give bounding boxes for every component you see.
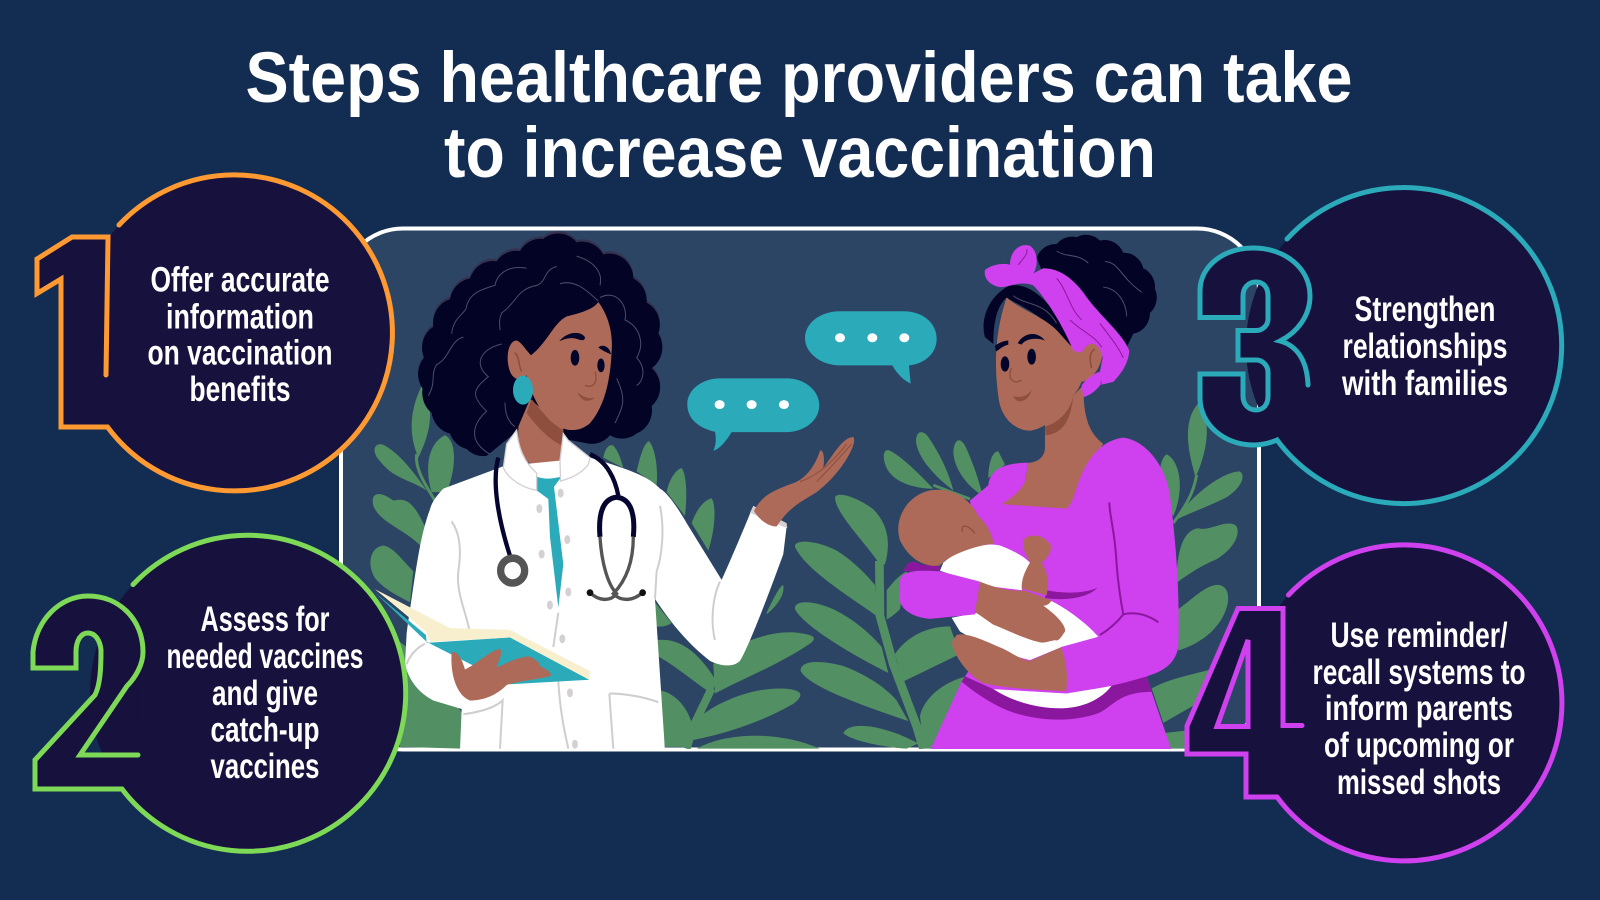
- text: step 3: relationships: [1342, 327, 1508, 366]
- title: Steps healthcare providers can take: [246, 39, 1352, 118]
- text: step 2: Assess for: [200, 600, 330, 639]
- mother hair: [1037, 235, 1157, 347]
- stethoscope: [496, 454, 646, 599]
- text: step 4: recall systems to: [1312, 653, 1526, 692]
- mother face: [984, 285, 1103, 431]
- text: step 1: benefits: [190, 370, 290, 409]
- book: [375, 589, 590, 684]
- text: step 2: and give: [212, 674, 318, 713]
- numeral 3 and ring: [1200, 188, 1562, 504]
- plants behind the doctor: [370, 386, 820, 749]
- step 1 badge: [37, 175, 392, 491]
- plants behind the mother: [795, 403, 1243, 749]
- text: step 2: catch-up: [210, 710, 320, 750]
- doctor: [375, 231, 854, 750]
- mother neck and dress: [930, 385, 1179, 750]
- white coat: [405, 430, 787, 750]
- numeral 2 and ring: [33, 535, 406, 851]
- mother arms: [899, 571, 1178, 693]
- numeral 1 and ring: [37, 175, 392, 491]
- text: step 4: [1312, 616, 1526, 802]
- raised hand: [754, 437, 854, 527]
- baby wrap: [940, 544, 1113, 708]
- text: step 4: inform parents: [1325, 689, 1513, 728]
- text: step 1: Offer accurate: [150, 260, 330, 300]
- title: to increase vaccination: [444, 114, 1156, 193]
- speech bubble left: [687, 378, 819, 451]
- title: [246, 39, 1352, 193]
- hand holding book: [451, 649, 551, 700]
- numeral 4 and ring: [1187, 545, 1562, 861]
- text: step 2: vaccines: [210, 747, 320, 786]
- text: step 4: of upcoming or: [1324, 726, 1514, 765]
- text: step 3: [1341, 290, 1508, 403]
- text: step 1: on vaccination: [148, 334, 332, 372]
- step 2 badge: [33, 535, 406, 851]
- text: step 3: with families: [1341, 364, 1508, 403]
- text: step 4: missed shots: [1337, 763, 1501, 802]
- step 3 badge: [1200, 188, 1562, 504]
- headband: [985, 245, 1142, 397]
- doctor neck and face: [508, 302, 612, 478]
- text: step 1: [148, 260, 332, 409]
- text: step 2: [166, 600, 364, 786]
- speech bubble right: [805, 311, 937, 384]
- panel: illustration of doctor and mother: [341, 228, 1259, 750]
- text: step 2: needed vaccines: [166, 637, 364, 676]
- text: step 1: information: [166, 298, 314, 336]
- mother and baby: [898, 235, 1179, 750]
- baby: [898, 490, 1051, 595]
- text: step 3: Strengthen: [1354, 290, 1496, 329]
- text: step 4: Use reminder/: [1330, 616, 1508, 655]
- doctor hair: [418, 231, 662, 456]
- dress details: [903, 502, 1152, 720]
- step 4 badge: [1187, 545, 1562, 861]
